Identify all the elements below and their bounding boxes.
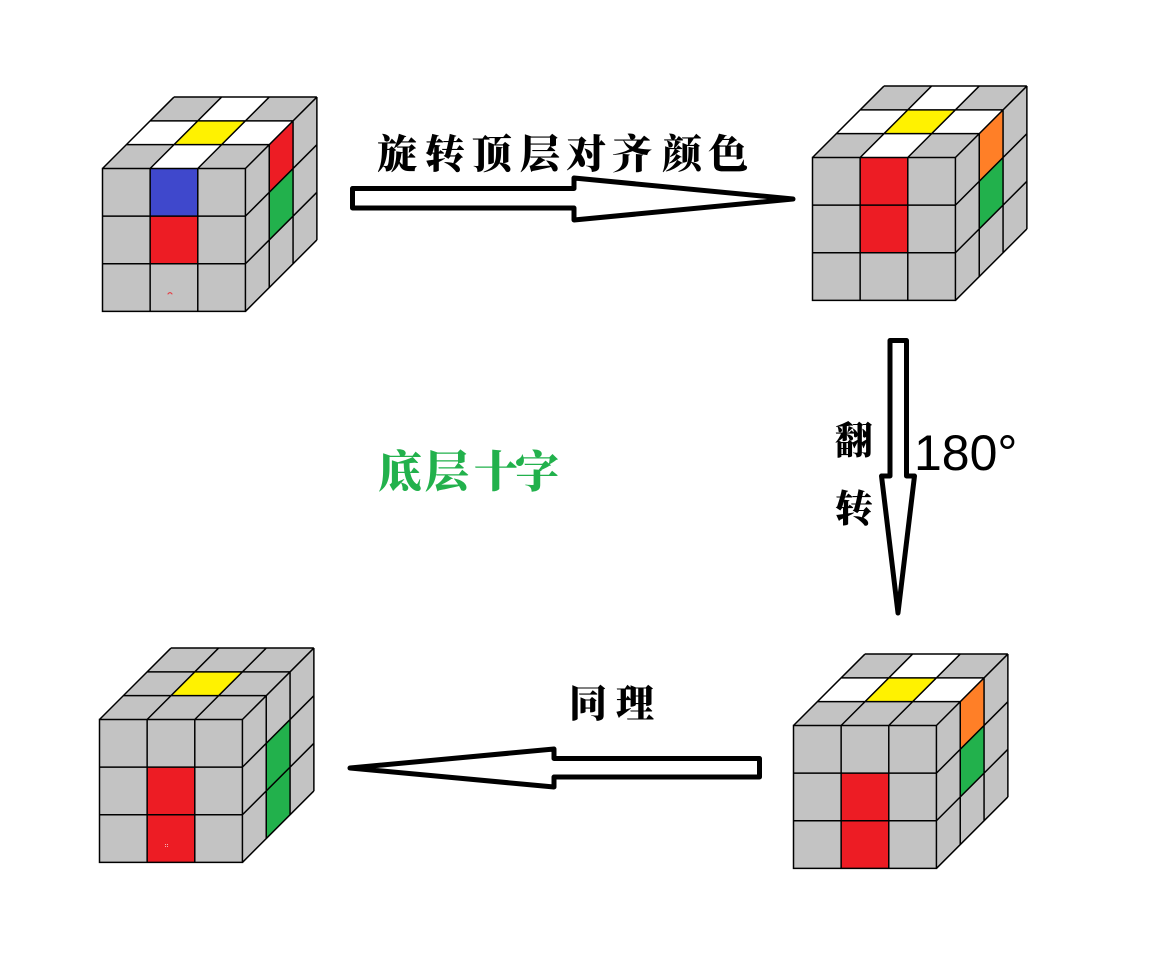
cube grid lines [100, 648, 314, 862]
red front column [841, 773, 889, 868]
green side sticker [960, 726, 984, 797]
tiny red mark [168, 293, 172, 295]
arrow: right [352, 178, 793, 220]
cube grid lines [102, 97, 317, 311]
arrow: left [350, 749, 760, 787]
cube grid lines [812, 86, 1027, 300]
red front column [147, 767, 195, 862]
white top stickers [836, 86, 1003, 158]
label: turn: 转 [835, 489, 873, 531]
yellow centre [171, 672, 242, 696]
green side sticker [979, 158, 1003, 229]
red side sticker [269, 121, 293, 192]
green side column [266, 720, 290, 839]
label: flip: 翻 [835, 421, 873, 463]
red front column [860, 158, 908, 253]
white top stickers [126, 97, 293, 168]
cube 2: after rotating top layer [812, 86, 1027, 300]
cube 4: final state, bottom left [100, 648, 314, 862]
blue front sticker [150, 168, 198, 216]
label: same method: 同理 [569, 684, 654, 726]
green side sticker [269, 168, 293, 240]
white top stickers [817, 654, 984, 702]
cube 3: flipped state, bottom right [794, 654, 1008, 868]
yellow centre [865, 678, 936, 702]
orange side sticker [960, 678, 984, 749]
tiny light mark [165, 845, 168, 847]
caption: bottom cross: 底层十字 [378, 447, 559, 497]
red front sticker [150, 216, 198, 264]
cube 1: start state, top right [102, 97, 317, 311]
heading: rotate top layer to align colours: 旋转顶层对齐颜色 [377, 132, 748, 177]
orange side sticker [979, 110, 1003, 181]
cube grid lines [794, 654, 1008, 868]
yellow centre [174, 121, 245, 145]
label: 180 degrees: 180° [914, 425, 1017, 481]
arrow: down [882, 340, 914, 613]
yellow centre [884, 110, 955, 134]
